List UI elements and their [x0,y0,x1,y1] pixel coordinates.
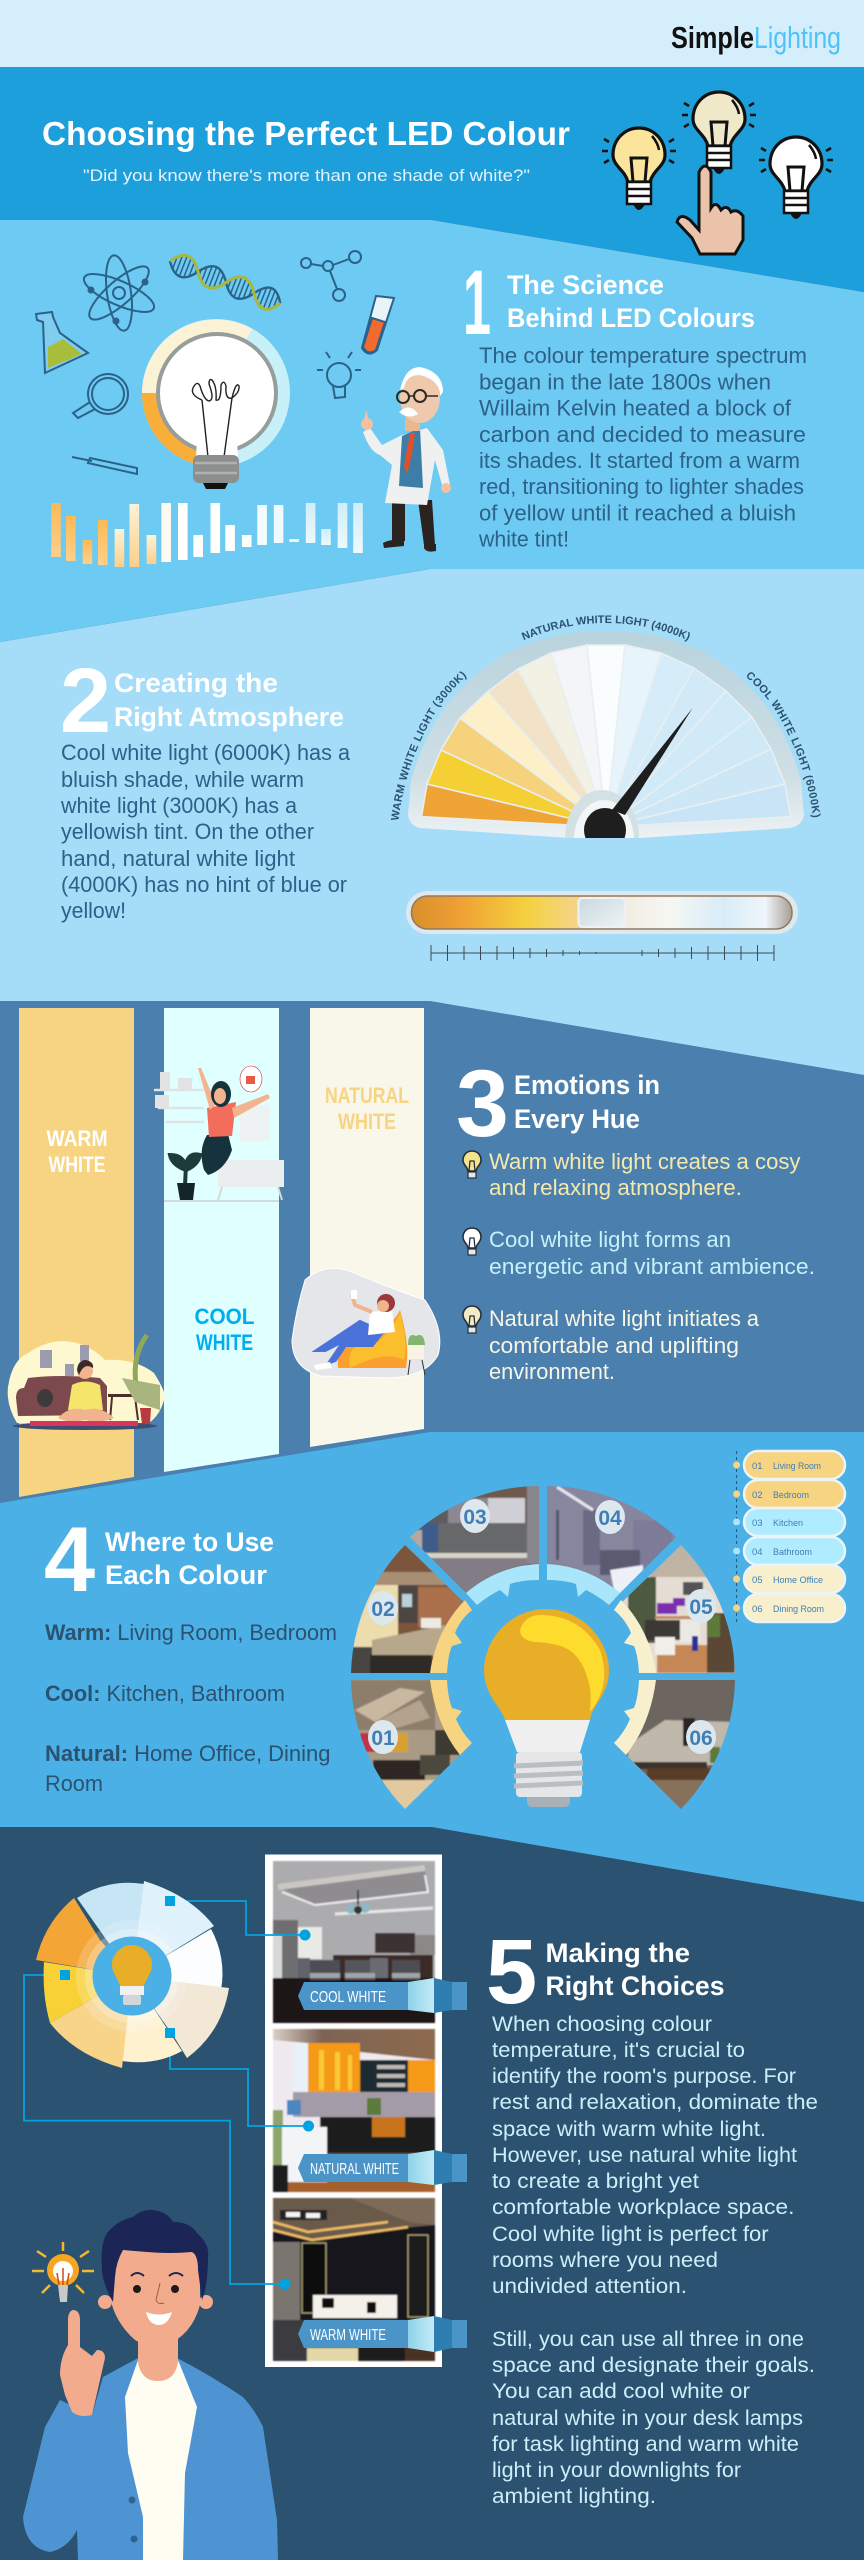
connector lines [24,1901,308,2284]
icon: warm bulb [463,1151,481,1178]
section 2 body text: Cool white light (6000K) has a [61,740,351,765]
legend: rooms: Kitchen [773,1518,803,1529]
ribbon label: cool white [298,1978,467,2013]
panel: section 1 background [0,220,864,642]
section 5 body text: temperature, it's crucial to [492,2039,745,2062]
illustration: scientist [361,367,451,552]
point: natural white: comfortable and uplifting [489,1333,739,1358]
photo wedge 05 office [614,1545,735,1673]
section 5 closing text: space and designate their goals. [492,2354,815,2377]
section 2 body text: bluish shade, while warm [61,767,304,792]
section 1 body text: of yellow until it reached a bluish [479,500,796,526]
connector dots [280,1930,314,2290]
section 5 body text: comfortable workplace space. [492,2196,794,2219]
section 5 body text: to create a bright yet [492,2170,699,2193]
section 5 closing text: for task lighting and warm white [492,2433,799,2456]
section 5 closing text: light in your downlights for [492,2459,741,2482]
icon: atom [79,254,159,332]
icon: test tube [362,296,394,354]
illustration: big light bulb with colour ring [142,319,290,489]
room list: Room [45,1771,103,1796]
section 5 closing text: Still, you can use all three in one [492,2328,804,2351]
point: warm white: Warm white light creates a cosy [489,1149,800,1174]
section 1 body text: The colour temperature spectrum [479,343,807,368]
section 4 heading: Each Colour [105,1560,267,1590]
number badges [368,1499,716,1754]
icon: flask [36,312,88,373]
ribbon label: warm white [298,2316,467,2352]
section 2 body text: yellow! [61,898,126,923]
label: natural white [325,1083,409,1134]
panel: section 2 background [0,569,864,1075]
badge numbers: 06 [689,1727,713,1750]
badge numbers [371,1506,713,1750]
title: Choosing the Perfect LED Colour [42,115,570,152]
section 2 body text: yellowish tint. On the other [61,819,314,844]
photo wedge 02 bedroom [351,1545,472,1673]
logo: Lighting [754,20,841,55]
point: natural white: environment. [489,1359,615,1384]
section 1 number: 1 [463,252,491,354]
section 3 heading: Every Hue [514,1104,640,1134]
panel: top logo band [0,0,864,67]
ribbon label: cool white: COOL WHITE [310,1989,386,2006]
section 1 heading [507,270,755,333]
label: natural white: WHITE [338,1109,396,1134]
room list: Cool: Kitchen, Bathroom [45,1681,285,1706]
legend: rooms: 04 [752,1547,763,1558]
icon: pipette [72,457,137,474]
legend: rooms: 06 [752,1604,763,1615]
section 2 body text [60,740,351,923]
photo wedge 06 dining [617,1680,735,1809]
section 5 body text: When choosing colour [492,2013,712,2036]
section 5 closing text: natural white in your desk lamps [492,2407,803,2430]
icon: magnifier [73,374,128,418]
room list [45,1620,337,1796]
logo [671,20,841,55]
label: warm white: WHITE [48,1152,106,1177]
legend: rooms: Bedroom [773,1490,809,1501]
section 4 heading [105,1527,274,1590]
section 2 heading: Right Atmosphere [114,702,344,732]
panel: section 5 background [0,1800,864,2560]
section 1 body text: began in the late 1800s when [479,370,771,394]
point: natural white [489,1306,760,1384]
section 5 closing text: ambient lighting. [492,2485,656,2508]
section 5 body text: space with warm white light. [492,2118,766,2141]
section 5 body text [492,2013,818,2298]
section 1 heading: The Science [507,270,664,300]
section 3 heading [514,1070,660,1134]
badge numbers: 02 [371,1598,395,1621]
section 5 heading: Right Choices [546,1971,724,2001]
chart: spectrum bars [51,503,363,567]
icon: idea bulb [32,2242,94,2302]
icon: natural bulb [463,1306,481,1333]
room list: Warm: Living Room, Bedroom [45,1620,337,1645]
room list: Natural: Home Office, Dining [45,1741,330,1766]
point: natural white: Natural white light initiates a [489,1306,760,1331]
section 5 closing text: You can add cool white or [492,2380,750,2403]
illustration: woman meditating on sofa [8,1335,165,1430]
point: warm white: and relaxing atmosphere. [489,1175,742,1200]
chart: colour temperature gauge [408,631,804,838]
icon: three light bulbs and pointing hand [602,92,833,254]
legend: rooms: 05 [752,1575,763,1586]
photo wedge 01 lobby [351,1680,466,1809]
illustration: man pointing up [23,2210,278,2560]
point: cool white [489,1227,815,1279]
section 5 body text: rest and relaxation, dominate the [492,2091,818,2114]
photo: natural white kitchen [273,2029,435,2192]
label: warm white [46,1126,108,1177]
section 1 body text [478,343,807,552]
icon: small bulb [317,352,361,398]
panel: header band [0,67,864,292]
section 1 heading: Behind LED Colours [507,303,755,333]
section 1 body text: white tint! [478,527,569,552]
label: warm white: WARM [46,1126,108,1151]
section 2 body text: (4000K) has no hint of blue or [61,872,347,897]
panel: section 4 background [0,1420,864,1902]
chart: colour wheel [36,1881,229,2068]
section 4 heading: Where to Use [105,1527,274,1557]
icon: molecule [301,251,361,301]
section 2 body text: hand, natural white light [61,846,295,871]
legend: rooms: 02 [752,1490,763,1501]
logo: Simple [671,20,754,55]
badge numbers: 01 [371,1727,395,1750]
point: warm white [489,1149,800,1200]
subtitle: "Did you know there's more than one shade of white?" [83,166,530,185]
slider tick scale [431,945,774,961]
illustration: central bulb [484,1609,609,1807]
panel: section 3 background [0,1001,864,1503]
gauge labels: WARM WHITE LIGHT (3000K) [390,671,467,820]
badge numbers: 04 [598,1507,622,1530]
illustration: jumping woman [154,1066,284,1201]
section 5 heading [546,1938,724,2001]
icon: cool bulb [463,1228,481,1255]
section 2 heading [114,668,344,732]
label: natural white: NATURAL [325,1083,409,1108]
legend: rooms: Home Office [773,1575,823,1586]
legend: rooms: Bathroom [773,1547,812,1558]
photo: cool white dining room [273,1861,435,2023]
section 2 heading: Creating the [114,668,278,698]
legend: rooms [733,1451,845,1623]
section 1 body text: its shades. It started from a warm [479,448,800,473]
label: cool white: COOL [194,1304,254,1329]
gauge labels [390,615,821,820]
section 5 closing text [492,2328,815,2508]
point: cool white: Cool white light forms an [489,1227,731,1252]
section 1 body text: carbon and decided to measure [479,422,806,447]
legend: rooms: 01 [752,1461,763,1472]
section 2 number: 2 [60,650,111,752]
section 3 heading: Emotions in [514,1070,660,1100]
icon: dna helix [168,254,282,311]
section 5 body text: undivided attention. [492,2275,687,2298]
panel: cool white column [164,1008,279,1472]
section 5 body text: However, use natural white light [492,2144,797,2167]
badge numbers: 05 [689,1596,713,1619]
section 2 body text: white light (3000K) has a [60,793,298,818]
panel: photo strip frame [265,1854,442,2367]
colour ring segments [430,1564,656,1755]
section 5 number: 5 [486,1921,537,2023]
section 5 body text: Cool white light is perfect for [492,2223,769,2246]
ribbon label: natural white: NATURAL WHITE [310,2161,399,2178]
section 1 body text: red, transitioning to lighter shades [479,474,804,499]
legend: rooms: Living Room [773,1461,821,1472]
ribbon label: warm white: WARM WHITE [310,2327,386,2344]
badge numbers: 03 [463,1506,487,1529]
label: cool white: WHITE [196,1330,253,1355]
label: cool white [194,1304,254,1355]
section 5 body text: rooms where you need [492,2249,718,2272]
slider [406,891,798,934]
section 3 number: 3 [456,1051,509,1157]
panel: warm white column [19,1008,134,1497]
legend: rooms: Dining Room [773,1604,824,1615]
legend: rooms: 03 [752,1518,763,1529]
illustration: science doodles [36,251,394,474]
section 5 body text: identify the room's purpose. For [492,2065,796,2088]
ribbon label: natural white [298,2150,467,2185]
photo wedge 03 kitchen [410,1486,539,1593]
point: cool white: energetic and vibrant ambience. [489,1254,815,1279]
section 4 number: 4 [44,1509,95,1611]
gauge labels: COOL WHITE LIGHT (6000K) [747,672,821,818]
panel: natural white column [310,1008,424,1447]
section 1 body text: Willaim Kelvin heated a block of [479,396,792,421]
illustration: man on bean bag [292,1268,440,1378]
section 5 heading: Making the [546,1938,690,1968]
photo wedge 04 bathroom [547,1486,676,1593]
photo: warm white living room [273,2198,435,2361]
gauge labels: NATURAL WHITE LIGHT (4000K) [521,615,690,642]
